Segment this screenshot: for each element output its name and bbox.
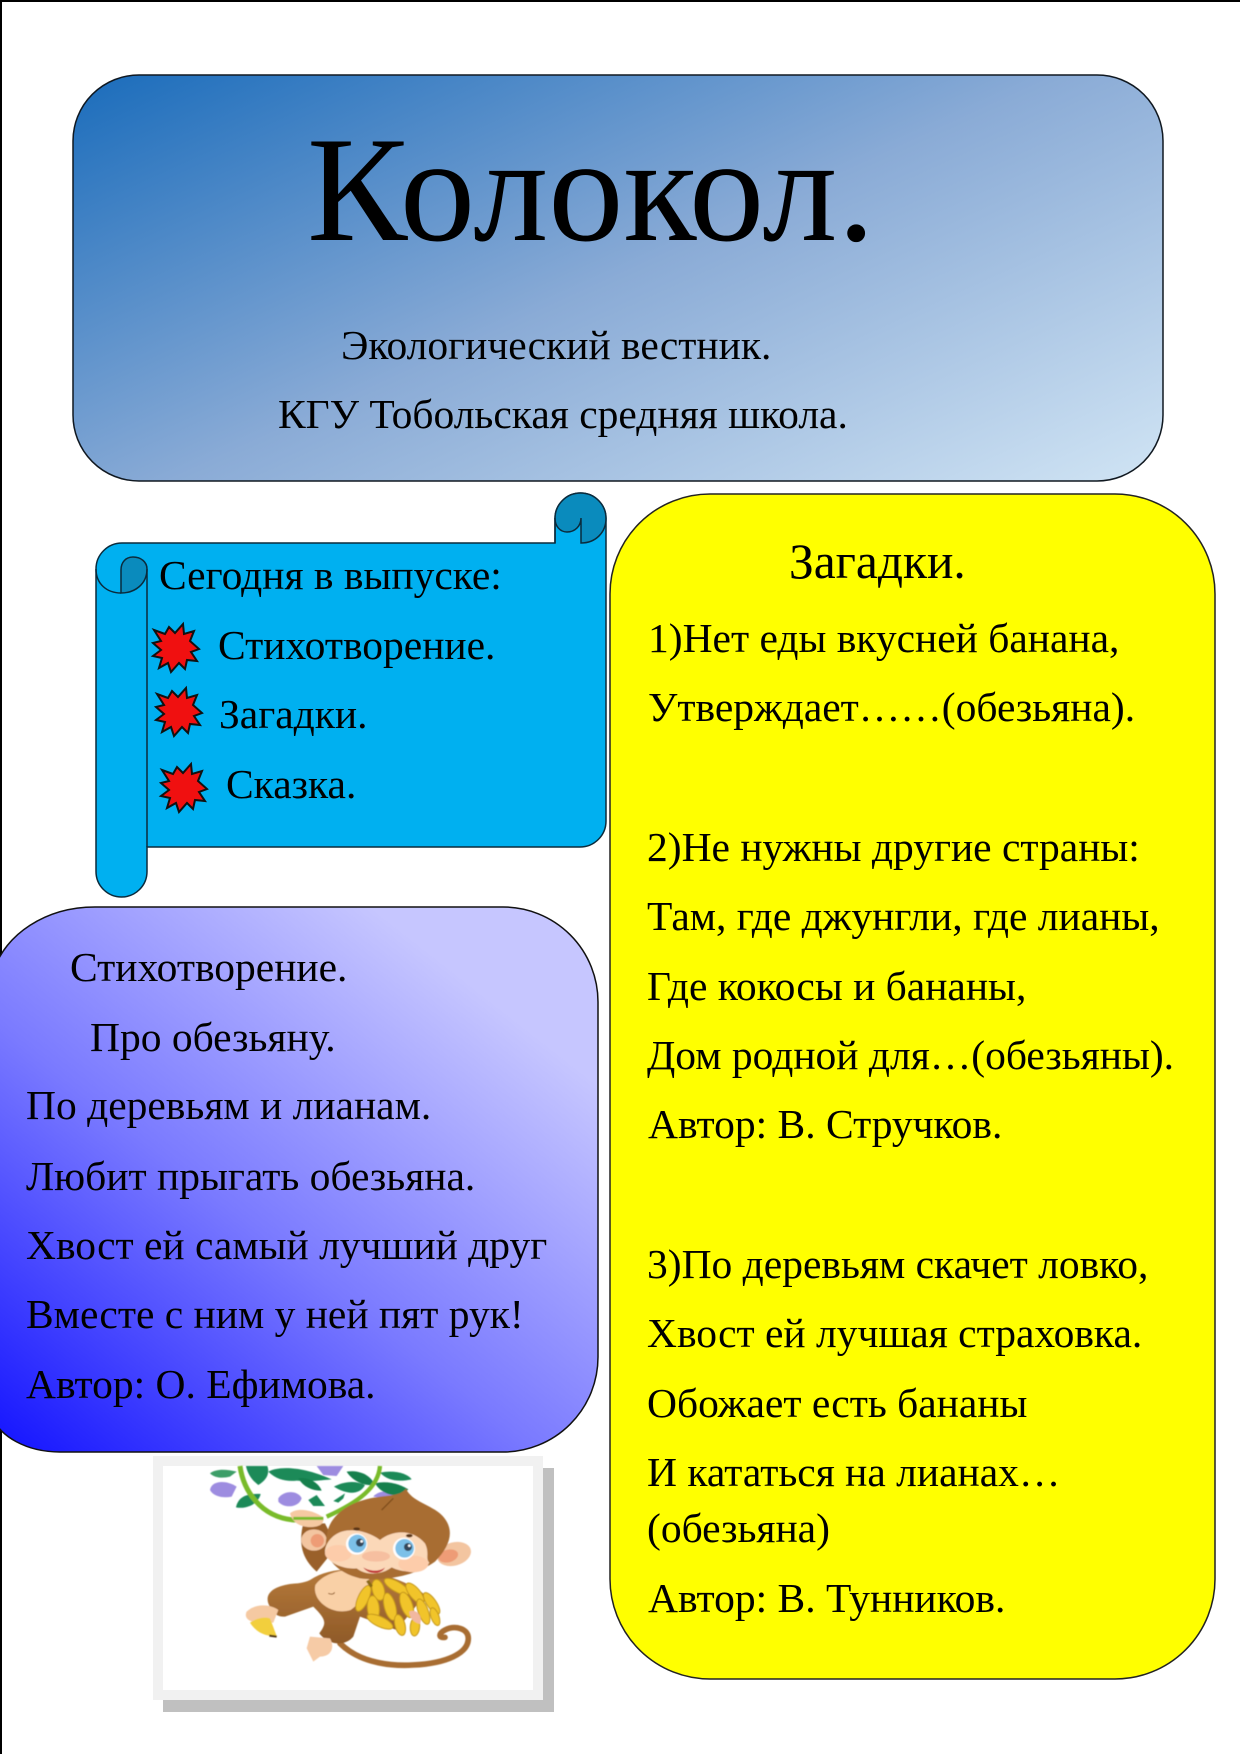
leg brown xyxy=(268,1570,425,1643)
panel: masthead xyxy=(73,75,1163,481)
contents heading: Сегодня в выпуске: xyxy=(159,552,502,598)
poem title: Про обезьяну. xyxy=(90,1014,336,1060)
riddle 3: И кататься на лианах… xyxy=(647,1449,1060,1495)
poem heading: Стихотворение. xyxy=(70,944,347,990)
icon: red burst xyxy=(153,624,199,672)
arm holding vine xyxy=(301,1523,337,1572)
riddle 2 xyxy=(647,824,1174,1147)
nose and mouth xyxy=(362,1551,390,1562)
leaves and flowers xyxy=(210,1466,412,1520)
riddles heading: Загадки. xyxy=(789,534,966,589)
foot xyxy=(307,1637,332,1662)
school name: КГУ Тобольская средняя школа. xyxy=(278,391,848,437)
panel: riddles xyxy=(610,494,1215,1679)
riddle 3: Обожает есть бананы xyxy=(647,1380,1027,1426)
poem lines xyxy=(26,1082,547,1337)
panel: poem xyxy=(0,907,598,1452)
title: Колокол. xyxy=(307,106,875,273)
contents item 2: Загадки. xyxy=(219,691,368,737)
poem lines: По деревьям и лианам. xyxy=(26,1082,431,1128)
belly xyxy=(315,1570,369,1611)
icon: red burst xyxy=(156,688,202,736)
poem lines: Любит прыгать обезьяна. xyxy=(26,1153,475,1199)
riddle 3 xyxy=(647,1241,1148,1621)
ears xyxy=(301,1529,327,1551)
poem lines: Хвост ей самый лучший друг xyxy=(26,1222,547,1268)
poem author: Автор: О. Ефимова. xyxy=(26,1361,376,1407)
riddle 2: 2)Не нужны другие страны: xyxy=(647,824,1140,871)
picture: monkey xyxy=(153,1456,554,1712)
eyes xyxy=(346,1533,367,1555)
riddle 2: Автор: В. Стручков. xyxy=(648,1101,1002,1147)
riddle 1 xyxy=(648,615,1135,731)
panel: contents scroll xyxy=(96,493,606,897)
head xyxy=(326,1489,450,1579)
riddle 3: Хвост ей лучшая страховка. xyxy=(647,1310,1142,1356)
riddle 3: Автор: В. Тунников. xyxy=(648,1575,1005,1621)
hand with banana xyxy=(246,1605,278,1623)
riddle 2: Дом родной для…(обезьяны). xyxy=(647,1032,1174,1079)
riddle 3: 3)По деревьям скачет ловко, xyxy=(647,1241,1148,1288)
bananas xyxy=(353,1575,443,1637)
face xyxy=(325,1530,429,1574)
poem lines: Вместе с ним у ней пят рук! xyxy=(26,1291,524,1337)
contents item 3: Сказка. xyxy=(226,761,356,807)
riddle 2: Где кокосы и бананы, xyxy=(647,963,1026,1009)
tail xyxy=(340,1628,468,1665)
riddle 3: (обезьяна) xyxy=(647,1505,830,1552)
riddle 1: 1)Нет еды вкусней банана, xyxy=(648,615,1119,662)
contents item 1: Стихотворение. xyxy=(218,622,495,668)
subtitle: Экологический вестник. xyxy=(341,322,771,368)
icon: red burst xyxy=(161,764,207,812)
riddle 2: Там, где джунгли, где лианы, xyxy=(647,893,1160,939)
riddle 1: Утверждает……(обезьяна). xyxy=(648,684,1135,731)
